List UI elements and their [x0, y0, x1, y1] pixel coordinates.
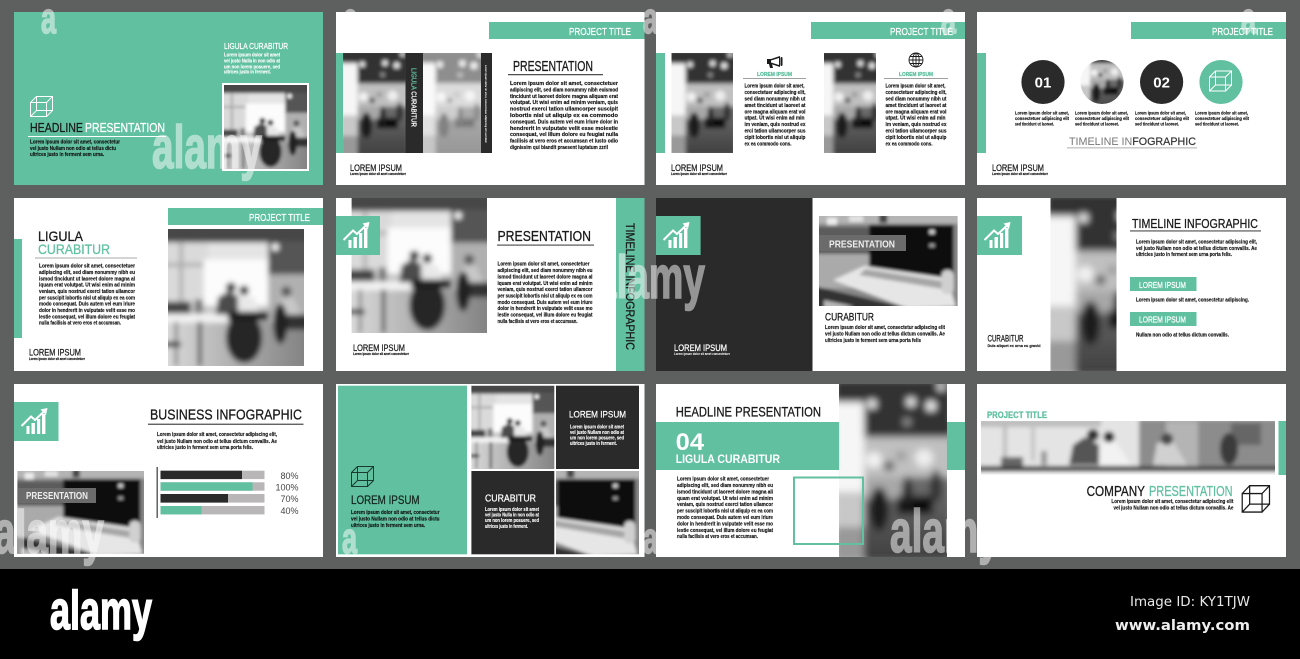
heading: presentation: PRESENTATION [498, 229, 591, 245]
panel: slide 2 presentation [336, 12, 644, 185]
footer band [0, 569, 1300, 659]
text block: nulla facilisis at vero eros et accumsan. [39, 321, 121, 327]
text block: volutpat. Ut wisi enim ad minim veniam, quis [510, 100, 618, 106]
bar chart: 40% [280, 506, 298, 516]
text block: ismod tincidunt ut laoreet dolore magna al [498, 274, 593, 280]
footer label: Lorem ipsum dolor sit amet consectetuer [350, 172, 407, 176]
text block right: consectetuer adipiscing elit, [886, 90, 947, 96]
text block: dolor in hendrerit in vulputate velit esse mo [39, 308, 136, 314]
text block: iquam erat volutpat. Ut wisi enim ad minim [39, 283, 135, 289]
text block [677, 477, 774, 540]
text block: nulla facilisis at vero eros et accumsan. [498, 319, 578, 325]
subheading: LIGULA CURABITUR [676, 454, 781, 466]
text block: vel justo Nullam non odio at tellus dictum convallis. Ae [1136, 246, 1257, 252]
text block: veniam, quis nostrud exerci tation ullamcor [39, 289, 136, 295]
dark tile: lorem ipsum: LOREM IPSUM [569, 410, 626, 421]
footer label [29, 348, 86, 361]
green label 2: LOREM IPSUM [1139, 316, 1186, 324]
green tile: LOREM IPSUM [351, 493, 420, 507]
text block: side note: vel justo Nulla in non odio at [224, 58, 280, 64]
footer label: Lorem ipsum dolor sit amet consectetuer [29, 357, 86, 361]
text block: lestie consequat, vel illum dolore eu feugiat [498, 313, 593, 319]
text block: Lorem ipsum dolor sit amet, consectetur adipiscing elit [1111, 499, 1234, 505]
heading: ligula curabitur: LIGULA CURABITUR [224, 41, 288, 51]
text block: ultricies justo in ferment sem urna porta felis. [1136, 252, 1232, 258]
text block: consequat, vel illum dolore eu feugiat nulla [510, 132, 619, 138]
panel: slide 8 timeline infographic [977, 193, 1286, 376]
timeline captions: sed tincidunt ut laoreet. [1195, 122, 1239, 126]
timeline captions: consectetuer adipiscing elit [1015, 116, 1069, 121]
text block [1136, 240, 1257, 258]
text block: lobortis nisl ut aliquip ex ea commodo [510, 113, 619, 119]
timeline captions: consectetuer adipiscing elit [1195, 116, 1249, 121]
photo tile [556, 471, 639, 554]
text block: side note [224, 52, 280, 76]
footer label: LOREM IPSUM [671, 163, 723, 173]
framed photo [220, 82, 311, 172]
narrow strip with small text: Lorem ipsum dolor sit amet, consectetuer adipiscing elit sed diam [484, 65, 488, 143]
text block: per suscipit lobortis nisl ut aliquip ex ea com [39, 295, 135, 301]
image id: Image ID: KY1TJW [1130, 595, 1250, 610]
circle photo [1080, 60, 1124, 104]
panorama photo [981, 421, 1275, 475]
website: www.alamy.com [1115, 618, 1250, 634]
text block [825, 325, 945, 344]
narrow strip with small text [481, 53, 492, 153]
photo [839, 384, 947, 557]
text block right: Lorem ipsum dolor sit amet, [886, 84, 946, 90]
text block right: erci tation ullamcorper sus [886, 128, 946, 134]
heading: presentation: PRESENTATION [513, 59, 593, 75]
text block: lestie consequat, vel illum dolore eu feugiat [677, 528, 773, 534]
timeline captions: Lorem ipsum dolor sit amet, [1195, 110, 1248, 116]
text block: adipiscing elit, sed diam nonummy nibh eu [677, 483, 773, 489]
panel: slide 7 dark split [656, 198, 965, 371]
text block left: amet tincidunt ut laoreet at [744, 103, 806, 109]
photo with label: PRESENTATION [26, 491, 88, 502]
text block [39, 264, 136, 327]
title bar: PROJECT TITLE [1212, 27, 1273, 38]
text block: per suscipit lobortis nisl ut aliquip ex ea com [677, 509, 773, 515]
project title: PROJECT TITLE [987, 410, 1047, 421]
timeline captions: Lorem ipsum dolor sit amet, [1135, 110, 1186, 116]
text block right: im veniam, quis nostrud ex [886, 122, 946, 128]
footer label: Lorem ipsum dolor sit amet consectetuer [353, 352, 410, 356]
green chart tile [656, 216, 701, 255]
heading: company presentation [1087, 484, 1232, 500]
text block: nostrud exerci tation ullamcorper suscipit [510, 107, 618, 113]
watermarks: alamy [595, 244, 705, 311]
watermarks: alamy [890, 498, 1000, 565]
dark tile: lorem ipsum: vel justo Nullam non odio at [570, 430, 624, 436]
text block right: sed diam nonummy nibh ut [886, 96, 947, 102]
panel: slide 9 business infographic [13, 384, 323, 558]
heading: timeline infographic: TIMELINE INFOGRAPHIC [1132, 217, 1258, 231]
photo [352, 198, 487, 333]
icon: wireframe cube [30, 96, 52, 116]
panel: slide 1 headline presentation [14, 12, 323, 185]
bar chart: 100% [275, 483, 298, 493]
text block: ultricies justo in ferment sem urna porta felis. [157, 445, 253, 451]
caption 1: Lorem ipsum dolor sit amet, consectetur adipiscing. [1136, 298, 1249, 304]
heading: headline presentation: HEADLINE [30, 120, 83, 135]
heading: headline presentation: PRESENTATION [85, 120, 165, 135]
faded photo [418, 50, 486, 156]
footer label: Lorem ipsum dolor sit amet consectetuer [992, 172, 1049, 176]
caption 2: Nullam non odio at tellus dictum convallis. [1136, 332, 1229, 338]
column heading: LOREM IPSUM [757, 72, 792, 78]
text block: consequat. Duis autem vel eum iriure dolor in [510, 119, 618, 125]
text block: tincidunt ut laoreet dolore magna aliquam erat [510, 94, 618, 100]
panel: slide 3 two columns [656, 12, 965, 185]
text block right: cipit lobortis nisl ut aliquip [886, 135, 947, 141]
dark tile: curabitur: ultrices justo in ferment. [485, 524, 528, 530]
panel: slide 12 company presentation [976, 384, 1286, 557]
text block left: erci tation ullamcorper sus [744, 128, 806, 134]
text block right: ore magna aliquam erat vol [886, 109, 947, 115]
title bar: PROJECT TITLE [569, 27, 631, 38]
text block: Lorem ipsum dolor sit amet, consectetuer [498, 262, 590, 268]
text block: Lorem ipsum dolor sit amet, consectetur adipiscing elit, [157, 432, 277, 438]
heading: ligula curabitur [35, 228, 137, 258]
text block: intro [30, 140, 121, 158]
text block: veniam, quis nostrud exerci tation ullamcor [498, 287, 593, 293]
green outline frame [794, 478, 863, 544]
dark tile: curabitur: um non lorem posuere, sed [485, 518, 539, 524]
vertical title strip: TIMELINE INFOGRAPHIC [623, 223, 637, 350]
dark tile: lorem ipsum: um non lorem posuere, sed [570, 436, 624, 442]
footer label: LOREM IPSUM [29, 348, 81, 358]
text block right: ex ea commodo cons. [886, 141, 933, 147]
title bar: PROJECT TITLE [890, 27, 953, 38]
bar chart: 70% [280, 494, 298, 504]
text block: vel justo Nullam non odio at tellus dictum convallis. Ae [1114, 506, 1234, 512]
dark tile: lorem ipsum: ultrices justo in ferment. [570, 441, 617, 447]
panel: slide 11 section 04 [656, 379, 965, 562]
watermarks: a [643, 514, 658, 563]
text block left: cipit lobortis nisl ut aliquip [744, 135, 806, 141]
title bar [489, 22, 644, 39]
green chart tile [14, 402, 58, 441]
text block: intro: vel justo Nullam non odio at tellus dictu [30, 146, 116, 152]
text block: dolor in hendrerit in vulputate velit esse mo [677, 521, 774, 527]
logo: alamy: alamy [50, 579, 152, 641]
footer label: LOREM IPSUM [350, 163, 402, 173]
text block: ismod tincidunt ut laoreet dolore magna al [39, 276, 135, 282]
side label: Duis aliquet ex urna eu gravid [988, 343, 1041, 348]
side label: CURABITUR [988, 334, 1024, 345]
photo left [672, 53, 733, 153]
green tile: vel justo Nullam non odio at tellus dictu [351, 516, 440, 522]
green tile [338, 386, 467, 554]
dark side panel [656, 198, 812, 371]
text block: side note: um non lorem posuere, sed [224, 64, 280, 70]
text block: Lorem ipsum dolor sit amet, consectetuer [510, 81, 619, 87]
photo [1050, 198, 1116, 371]
watermarks: a [342, 514, 357, 563]
heading: ligula curabitur: LIGULA [38, 228, 84, 244]
timeline captions: sed tincidunt ut laoreet. [1135, 122, 1179, 126]
dark tile: curabitur [471, 471, 554, 554]
text block right: amet tincidunt ut laoreet at [886, 103, 947, 109]
photo tile [471, 386, 554, 469]
text block: ultricies justo in ferment sem urna porta felis [825, 338, 921, 344]
text block: Lorem ipsum dolor sit amet, consectetur adipiscing elit [825, 325, 945, 331]
title bar [168, 208, 323, 225]
dark tile: curabitur: CURABITUR [485, 493, 536, 505]
column heading: LOREM IPSUM [899, 72, 933, 78]
text block: iquam erat volutpat. Ut wisi enim ad minim [498, 281, 593, 287]
text block [157, 432, 277, 451]
text block: adipiscing elit, sed diam nonummy nibh eu [39, 270, 135, 276]
title bar [811, 22, 965, 39]
photo [343, 53, 406, 153]
text block: quam erat volutpat. Ut wisi enim ad minim [677, 496, 773, 502]
heading: timeline infographic: TIMELINE INFOGRAPHIC [1069, 136, 1196, 148]
green label 1: LOREM IPSUM [1139, 281, 1186, 290]
green chart tile [336, 216, 380, 255]
timeline captions: Lorem ipsum dolor sit amet, [1015, 110, 1069, 116]
text block [510, 81, 619, 151]
text block: intro: ultrices justo in ferment sem urna. [30, 152, 104, 158]
text block right [886, 84, 947, 147]
footer label: Lorem ipsum dolor sit amet consectetuer [671, 172, 728, 176]
text block: hendrerit in vulputate velit esse molestie [510, 126, 618, 132]
dark tile: curabitur: vel justo Nulla in non odio at [485, 512, 539, 518]
photo with label [814, 211, 963, 311]
vertical label strip [406, 53, 424, 153]
green tile: Lorem ipsum dolor sit amet, consectetur [351, 510, 440, 516]
dark tile: curabitur: Lorem ipsum dolor sit amet [485, 507, 539, 513]
text block right: utpat. Ut wisi enim ad min [886, 116, 946, 122]
text block: lestie consequat, vel illum dolore eu feugiat [39, 314, 135, 320]
heading: company presentation: COMPANY [1087, 484, 1145, 500]
icon: wireframe cube [1242, 486, 1270, 512]
text block left [744, 84, 806, 147]
text block: dolor in hendrerit in vulputate velit esse mo [498, 306, 593, 312]
text block: facilisis at vero eros et accumsan et iusto odio [510, 139, 619, 145]
circle cube icon [1199, 60, 1243, 104]
photo [168, 229, 304, 366]
text block: ismod tincidunt ut laoreet dolore magna ali [677, 489, 773, 495]
footer label: Lorem ipsum dolor sit amet consectetuer [674, 352, 731, 356]
vertical label strip: LIGULA CURABITUR [410, 68, 418, 127]
green chart tile [977, 216, 1022, 255]
heading: ligula curabitur: CURABITUR [38, 241, 110, 257]
heading: headline presentation: HEADLINE PRESENTATION [676, 403, 821, 419]
text block left: ore magna aliquam erat vol [744, 109, 806, 115]
icon: megaphone [767, 56, 782, 68]
heading: business infographic: BUSINESS INFOGRAPHIC [150, 408, 302, 424]
text block: side note: Lorem ipsum dolor sit amet [224, 52, 280, 58]
green label 2 [1130, 312, 1196, 326]
circle 01: 01 [1035, 74, 1051, 92]
timeline captions: sed tincidunt ut laoreet. [1075, 122, 1119, 126]
vertical title strip [616, 198, 644, 371]
circle 02: 02 [1153, 74, 1170, 92]
panel: slide 4 timeline [977, 12, 1286, 185]
text block: adipiscing elit, sed diam nonummy nibh euismod [510, 87, 618, 93]
timeline captions: consectetuer adipiscing elit [1075, 116, 1129, 121]
title bar [1131, 22, 1286, 39]
text block left: consectetuer adipiscing elit, [744, 90, 806, 96]
panel: slide 5 ligula curabitur [14, 198, 323, 371]
heading: headline presentation [30, 120, 165, 135]
text block left: Lorem ipsum dolor sit amet, [744, 84, 805, 90]
text block [498, 262, 593, 325]
text block: intro: Lorem ipsum dolor sit amet, consectetur [30, 140, 121, 146]
footer label: LOREM IPSUM [674, 343, 727, 353]
icon: globe [909, 53, 923, 67]
footer label: LOREM IPSUM [992, 163, 1044, 173]
column heading [884, 72, 948, 79]
bar chart: 80% [280, 471, 298, 481]
green tile: ultrices justo in ferment sem urna. [351, 523, 425, 529]
photo with label [13, 466, 149, 558]
timeline captions: Lorem ipsum dolor sit amet, [1075, 110, 1128, 116]
text block: side note: ultrices justo in ferment. [224, 70, 271, 76]
text block: vel justo Nullam non odio at tellus dictum convallis. Ae [157, 439, 277, 445]
photo right [824, 53, 876, 153]
text block: modo consequat. Duis autem vel eum iriure [498, 300, 592, 306]
timeline captions: consectetuer adipiscing elit [1135, 116, 1189, 121]
text block left: im veniam, quis nostrud ex [744, 122, 806, 128]
column heading [743, 72, 806, 79]
footer label: LOREM IPSUM [353, 343, 405, 353]
dark tile: lorem ipsum [556, 386, 639, 469]
circle 01 [1021, 60, 1065, 104]
number 04: 04 [676, 429, 705, 456]
heading: curabitur: CURABITUR [825, 312, 874, 324]
text block: Lorem ipsum dolor sit amet, consectetuer [677, 477, 770, 483]
timeline captions: sed tincidunt ut laoreet. [1015, 122, 1054, 126]
text block: veniam, quis nostrud exerci tation ullamcor [677, 502, 774, 508]
green label 1 [1130, 277, 1196, 291]
text block left: ex ea commodo cons. [744, 141, 792, 147]
heading: company presentation: PRESENTATION [1149, 484, 1232, 500]
panel: slide 10 grid [336, 383, 644, 559]
text block: modo consequat. Duis autem vel eum iriure [677, 515, 773, 521]
text block: Lorem ipsum dolor sit amet, consectetuer [39, 264, 136, 270]
timeline captions [1015, 110, 1249, 126]
text block left: sed diam nonummy nibh ut [744, 96, 806, 102]
title bar: PROJECT TITLE [249, 213, 310, 224]
green band [656, 422, 965, 470]
text block [1111, 499, 1234, 512]
text block left: utpat. Ut wisi enim ad min [744, 116, 804, 122]
photo with label: PRESENTATION [829, 238, 895, 250]
text block: modo consequat. Duis autem vel eum iriure [39, 302, 135, 308]
text block: per suscipit lobortis nisl ut aliquip ex ea com [498, 294, 593, 300]
text block: nulla facilisis at vero eros et accumsan. [677, 534, 758, 540]
text block: Lorem ipsum dolor sit amet, consectetur adipiscing elit, [1136, 240, 1257, 246]
dark tile: lorem ipsum: Lorem ipsum dolor sit amet [570, 424, 624, 430]
panel: slide 6 presentation [336, 193, 644, 371]
text block: dignissim qui blandit praesent luptatum zzril [510, 145, 608, 151]
bar chart [156, 467, 298, 518]
text block: adipiscing elit, sed diam nonummy nibh eu [498, 268, 592, 274]
text block: vel justo Nullam non odio at tellus dictum convallis. Ae [825, 332, 945, 338]
circle 02 [1140, 60, 1183, 104]
watermarks: alamy [152, 114, 262, 181]
